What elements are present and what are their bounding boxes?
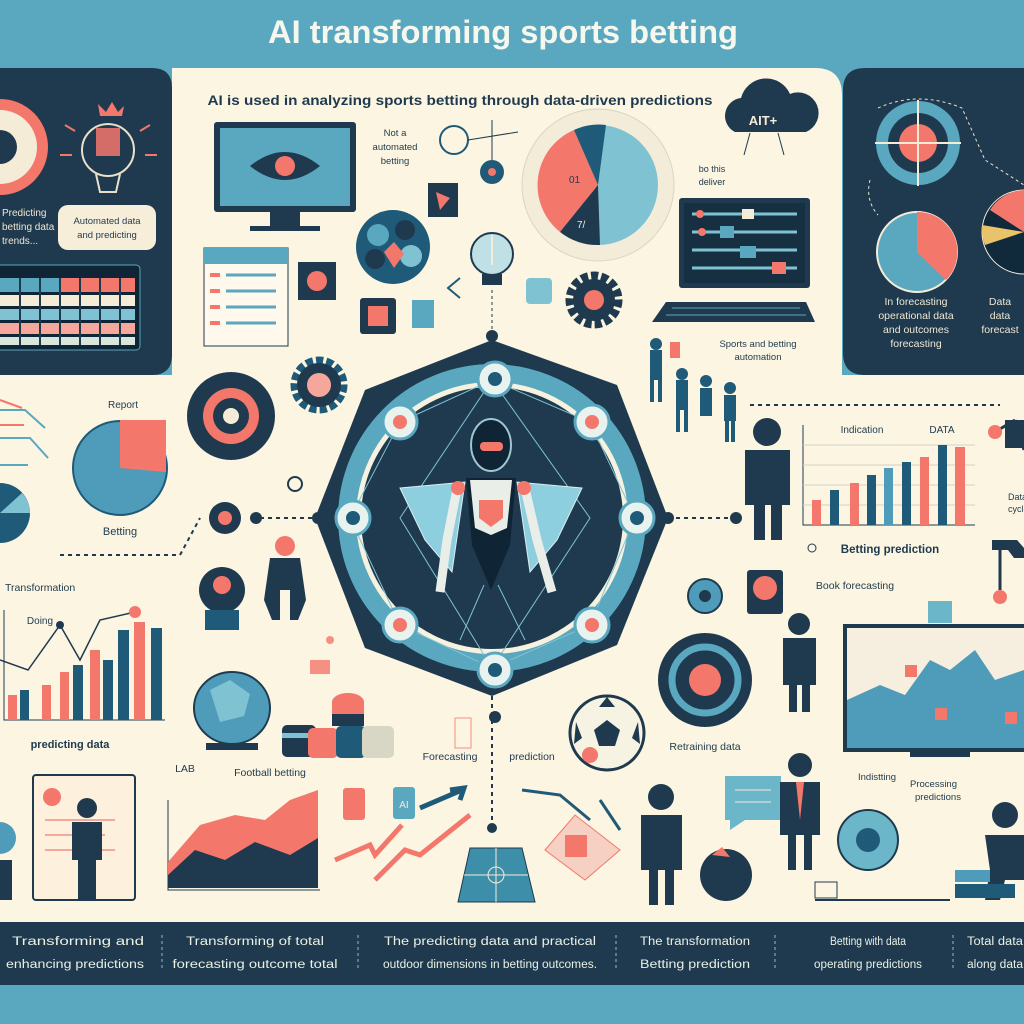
text: mid labels: Football betting (234, 767, 306, 779)
text: mid labels: prediction (509, 751, 555, 763)
text: book forecasting: Book forecasting (816, 580, 894, 592)
dark sphere (700, 847, 752, 901)
icon: dial dark (187, 372, 275, 460)
bottom text (6, 936, 1024, 971)
left top network (0, 400, 48, 465)
arrows rising (335, 788, 470, 880)
text: mid labels: LAB (175, 763, 195, 775)
bottom text: operating predictions (814, 959, 922, 971)
bar chart: right: Indication (841, 425, 883, 436)
standing figure (783, 613, 816, 712)
text: monitor note (373, 128, 417, 167)
area chart (168, 790, 320, 890)
soccer ball (570, 696, 644, 770)
text: forecasting note: Processing (910, 779, 957, 790)
right nodes (988, 420, 1024, 514)
pie chart (877, 212, 957, 292)
small mid icons (310, 636, 471, 748)
text: forecasting note (858, 772, 961, 803)
text: monitor note: Not a (384, 128, 407, 139)
bar chart: right: DATA (929, 425, 955, 436)
pie chart large (522, 109, 674, 261)
pie chart large: 7/ (577, 220, 586, 231)
icon: gear top (570, 276, 618, 324)
people group (650, 338, 736, 442)
text: right notes: forecasting (890, 338, 942, 350)
icon: gauge ring (0, 99, 48, 195)
robot arm (992, 540, 1024, 604)
text: left notes: trends... (2, 236, 38, 247)
text: pie note: bo this (699, 164, 726, 174)
roulette (658, 633, 752, 727)
network lines (350, 380, 635, 668)
icons row (688, 544, 952, 623)
clipboard (33, 775, 135, 900)
icon: lightbulb (60, 102, 157, 192)
robot partial left (0, 822, 16, 900)
text: mid labels: Forecasting (423, 751, 478, 763)
text: people note: automation (734, 352, 782, 363)
text: pie note: deliver (699, 177, 725, 187)
icon: lightbulb center (471, 233, 513, 284)
text: left heading: Transformation (5, 582, 75, 594)
bottom text: along data (967, 959, 1024, 971)
text: pie note (699, 164, 726, 187)
connector dots (250, 330, 742, 833)
monitor (214, 122, 356, 231)
dashed loop (869, 99, 1024, 215)
bottom text: Betting prediction (640, 959, 750, 971)
callout: and predicting (77, 230, 137, 241)
subtitle: AI is used in analyzing sports betting through data-driven predictions (208, 92, 713, 108)
panel: right dark (843, 68, 1024, 375)
connector icons (298, 120, 552, 335)
icon: target dial (875, 100, 961, 186)
title: AI transforming sports betting (268, 14, 738, 50)
lens icon (815, 810, 950, 900)
bar chart: right (803, 425, 975, 525)
bottom text: Transforming and (12, 936, 144, 948)
bottom text: forecasting outcome total (172, 959, 338, 971)
text: right notes: data (990, 310, 1010, 322)
connectors center (60, 405, 1000, 830)
seated person (955, 802, 1024, 900)
text: left notes (2, 208, 55, 247)
person standing (641, 784, 682, 905)
icon: AI cloud: AIT+ (749, 113, 778, 128)
text: right notes: operational data (878, 310, 954, 322)
bottom text: outdoor dimensions in betting outcomes. (383, 959, 597, 971)
text: betting prediction: Betting prediction (841, 544, 939, 556)
bottom text: Total data (967, 936, 1024, 948)
ring (347, 373, 637, 663)
pie chart left: Report (108, 400, 138, 411)
standing figure big (745, 418, 790, 540)
poker chips (282, 693, 394, 758)
suited person (780, 753, 820, 870)
text: monitor note: betting (381, 156, 409, 167)
diamond network (522, 790, 620, 880)
keyboard (652, 302, 815, 322)
dial partial (982, 190, 1024, 274)
text: forecasting note: Indistting (858, 772, 896, 783)
football field (458, 848, 535, 902)
checklist panel (204, 248, 288, 346)
text: mid labels (175, 741, 741, 779)
text: monitor note: automated (373, 142, 417, 153)
pie chart left: Betting (103, 526, 137, 538)
text: right notes (878, 296, 1019, 350)
pie chart large: 01 (569, 175, 581, 186)
ai tile icons (343, 787, 415, 820)
text: mid labels: Retraining data (669, 741, 741, 753)
callout (58, 205, 156, 250)
panel: central octagon (315, 340, 668, 696)
bar chart: left (0, 606, 165, 720)
icon: crystal ball (194, 672, 270, 750)
ai tile icons: AI (399, 800, 409, 811)
callout: Automated data (73, 216, 141, 227)
bottom text: enhancing predictions (6, 959, 144, 971)
TV line chart (843, 624, 1024, 757)
ring nodes (336, 362, 654, 687)
icon: geometric globe (356, 210, 430, 284)
icon: small node (209, 477, 302, 534)
bottom text: Transforming of total (186, 936, 324, 948)
speech bubble (725, 776, 781, 830)
robot wings (400, 482, 465, 572)
icon: gear left (295, 361, 343, 409)
pie partial (0, 483, 30, 543)
table (0, 265, 140, 350)
panel: bottom bar (0, 922, 1024, 985)
bottom text: Betting with data (830, 936, 907, 948)
robot (440, 419, 552, 640)
text: right notes: and outcomes (883, 324, 949, 336)
text: forecasting note: predictions (915, 792, 961, 803)
crouching player (264, 536, 306, 620)
text: doing: Doing (27, 616, 53, 627)
text: predicting data: predicting data (31, 739, 110, 751)
bottom text: The transformation (640, 936, 750, 948)
text: right notes: In forecasting (884, 296, 948, 308)
text: left notes: betting data (2, 222, 55, 233)
text: right notes: forecast (981, 324, 1019, 336)
text: right notes: Data (989, 296, 1011, 308)
pie chart left (73, 400, 167, 538)
text: people note: Sports and betting (719, 339, 797, 350)
panel: left dark (0, 68, 172, 375)
icon: AI cloud (725, 78, 819, 155)
text: left notes: Predicting (2, 208, 46, 219)
text: people note (719, 339, 797, 363)
dashboard sliders (679, 198, 810, 288)
robot small (199, 567, 245, 630)
bottom text: The predicting data and practical (384, 936, 596, 948)
